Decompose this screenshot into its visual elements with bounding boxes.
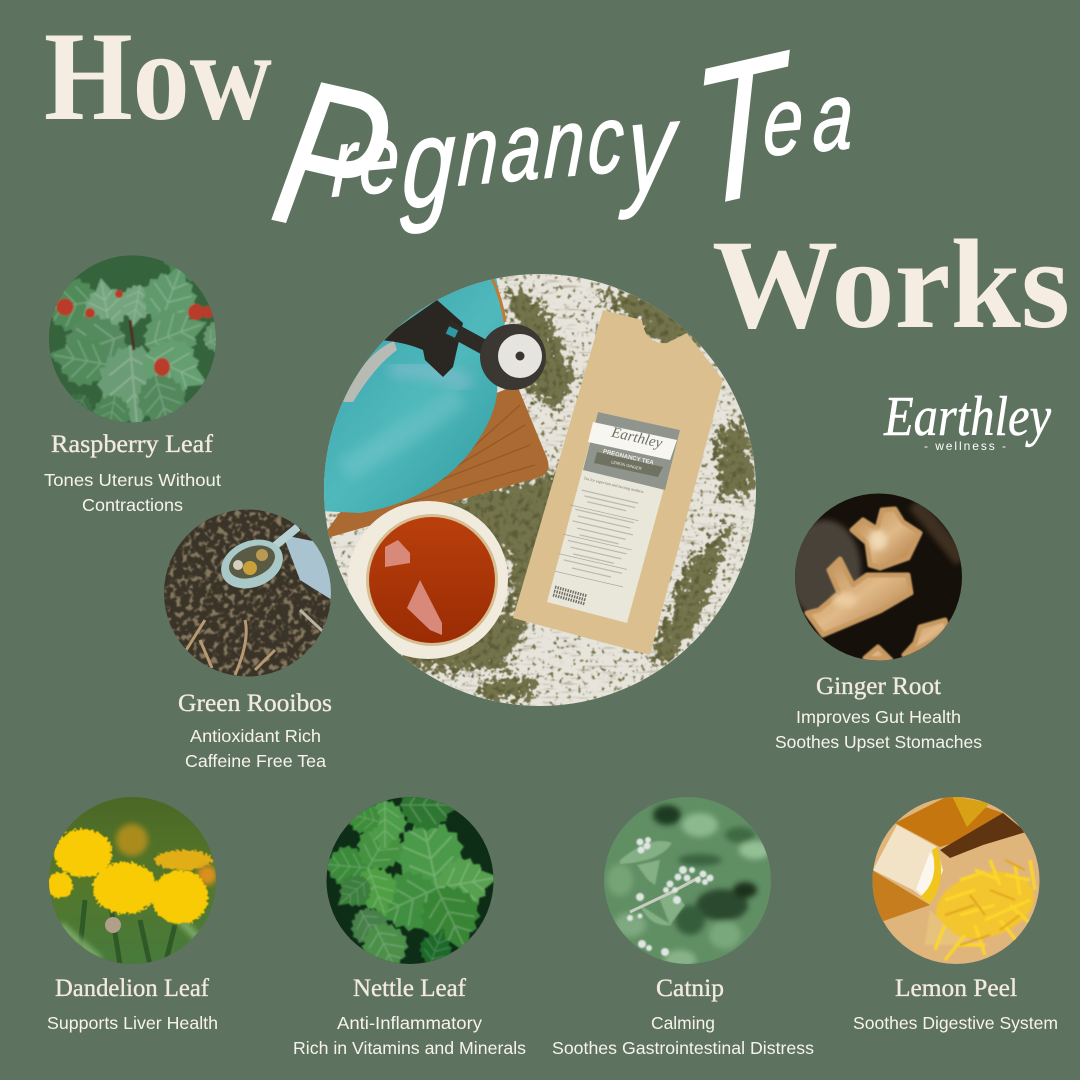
tea spoon: [221, 524, 300, 588]
title script: Pregnancy Tea: ea: [761, 61, 866, 176]
logo: Earthley wellness: Earthley: [883, 386, 1051, 448]
label: Ginger Root: Ginger Root: [816, 673, 941, 700]
label: Raspberry Leaf: [44, 431, 221, 515]
label: Catnip: [552, 975, 814, 1058]
label: Raspberry Leaf: Raspberry Leaf: [51, 431, 214, 458]
bag label: Tea for expectant and nursing mothers: [583, 475, 645, 494]
tabletop: [324, 274, 756, 706]
wooden board: [320, 385, 548, 540]
label: Green Rooibos: Green Rooibos: [178, 690, 332, 717]
photo: catnip: [604, 797, 772, 970]
photo: dandelion: [47, 797, 217, 965]
photo: raspberry leaf: [49, 256, 216, 422]
title script: Pregnancy Tea: re: [330, 104, 405, 217]
label: Green Rooibos: Antioxidant Rich: [190, 726, 321, 746]
photo: tea kettle, cup and pregnancy tea bag: [300, 272, 756, 706]
title script: Pregnancy Tea: y: [618, 74, 682, 221]
label: Raspberry Leaf: Tones Uterus Without: [44, 470, 221, 490]
title script: Pregnancy Tea: nanc: [456, 84, 630, 206]
photo: green rooibos: [164, 509, 332, 677]
label: Nettle Leaf: Rich in Vitamins and Minerals: [293, 1038, 526, 1058]
photo: nettle leaf: [326, 797, 494, 964]
title script: Pregnancy Tea: P: [257, 24, 406, 293]
label: Catnip: Soothes Gastrointestinal Distress: [552, 1038, 814, 1058]
label: Lemon Peel: Soothes Digestive System: [853, 1013, 1058, 1033]
kettle body: [324, 278, 505, 513]
title word: Works: Works: [712, 215, 1070, 355]
label: Nettle Leaf: Nettle Leaf: [353, 975, 467, 1002]
grated peel: [925, 860, 1042, 960]
logo: Earthley wellness: - wellness -: [924, 439, 1006, 453]
title script: Pregnancy Tea: T: [679, 7, 806, 252]
tea cup: [348, 501, 508, 659]
title: [44, 0, 1070, 355]
label: Catnip: Calming: [651, 1013, 715, 1033]
label: Green Rooibos: [178, 690, 332, 771]
title script: Pregnancy Tea: g: [400, 89, 461, 236]
loose herbs: [390, 288, 755, 700]
label: Nettle Leaf: [293, 975, 526, 1058]
label: Raspberry Leaf: Contractions: [82, 495, 183, 515]
bag label: PREGNANCY TEA: [602, 449, 655, 467]
label: Nettle Leaf: Anti-Inflammatory: [337, 1013, 482, 1033]
label: Dandelion Leaf: Supports Liver Health: [47, 1013, 218, 1033]
photo: ginger root: [789, 493, 963, 661]
label: Catnip: Catnip: [656, 975, 724, 1002]
photo: lemon peel: [872, 795, 1042, 965]
label: Dandelion Leaf: [47, 975, 218, 1033]
title script: Pregnancy Tea: [257, 0, 869, 293]
berries: [56, 290, 214, 376]
title word: How: How: [44, 7, 272, 147]
label: Ginger Root: Soothes Upset Stomaches: [775, 732, 982, 752]
label: Ginger Root: [775, 673, 982, 752]
label: Lemon Peel: Lemon Peel: [895, 975, 1017, 1002]
label: Green Rooibos: Caffeine Free Tea: [185, 751, 326, 771]
label: Dandelion Leaf: Dandelion Leaf: [55, 975, 210, 1002]
label: Lemon Peel: [853, 975, 1058, 1033]
kettle handle: [380, 300, 463, 377]
bag label: LEMON GINGER: [611, 459, 642, 471]
kettle silver rim: [343, 341, 397, 402]
bag label: Earthley: [609, 424, 664, 452]
paper tea bag: [513, 310, 723, 655]
bag label: [547, 412, 680, 623]
label: Ginger Root: Improves Gut Health: [796, 707, 961, 727]
